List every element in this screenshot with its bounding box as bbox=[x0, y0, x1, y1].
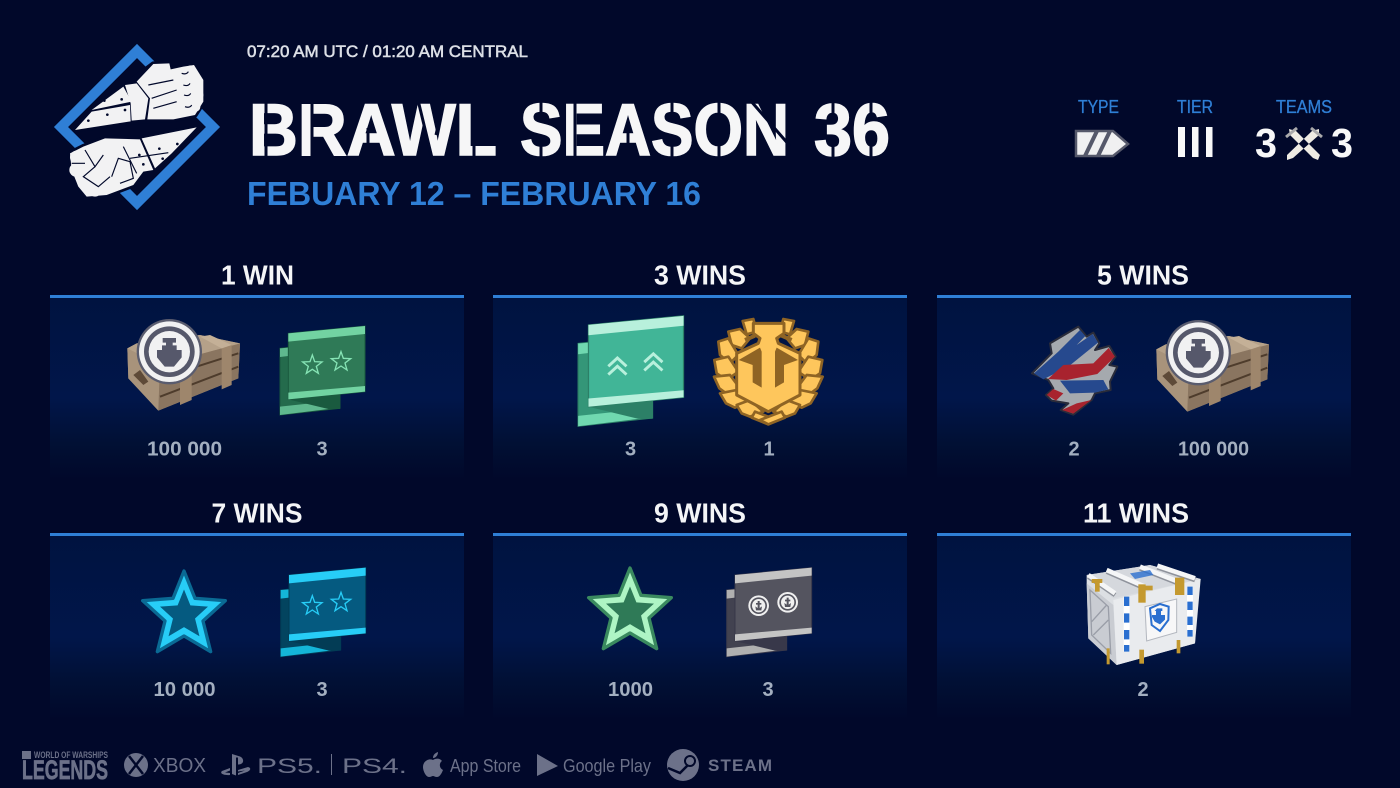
heading: 5 wins: 5 WINS bbox=[1097, 260, 1189, 290]
icon: teal chevron flag bbox=[578, 316, 684, 426]
icon: credits crate bbox=[1156, 320, 1269, 412]
logo: App Store: App Store bbox=[450, 756, 521, 776]
label: 2: 2 bbox=[1137, 679, 1149, 701]
icon: green star bbox=[589, 568, 671, 649]
panel: 1 win bbox=[50, 260, 464, 480]
logo: Steam bbox=[667, 749, 772, 781]
panel: 5 wins bbox=[937, 260, 1351, 480]
label: 100 000: 100 000 bbox=[147, 438, 222, 460]
panel: 3 wins bbox=[493, 260, 907, 480]
icon: green star flag bbox=[280, 326, 365, 415]
heading: 1 win: 1 WIN bbox=[221, 260, 294, 290]
info: tier bbox=[1177, 97, 1213, 157]
info: teams bbox=[1255, 97, 1353, 166]
logo: Google Play: Google Play bbox=[563, 756, 651, 776]
logo: Xbox bbox=[124, 753, 206, 777]
logo: App Store bbox=[423, 752, 521, 777]
footer: platform logos bbox=[22, 749, 772, 785]
info: type: TYPE bbox=[1078, 97, 1119, 117]
label: 3: 3 bbox=[316, 679, 328, 701]
logo: Steam: STEAM bbox=[708, 756, 772, 775]
icon: crossed swords bbox=[1286, 128, 1322, 160]
panel: 11 wins bbox=[937, 498, 1351, 720]
icon: blue star bbox=[143, 571, 225, 652]
info: tier: TIER bbox=[1177, 97, 1213, 117]
label: 3: 3 bbox=[625, 438, 636, 460]
heading: 11 wins: 11 WINS bbox=[1083, 498, 1189, 528]
heading: 3 wins: 3 WINS bbox=[654, 260, 746, 290]
icon: white premium crate bbox=[1087, 565, 1201, 665]
panel: 9 wins bbox=[493, 498, 907, 720]
logo: crossed gauntlets in a diamond bbox=[61, 51, 213, 203]
date range: FEBUARY 12 – FEBRUARY 16 bbox=[247, 175, 701, 212]
title: SEASON bbox=[520, 90, 789, 171]
info: teams: 3 bbox=[1331, 120, 1353, 166]
info: type bbox=[1076, 97, 1128, 156]
title: 36 bbox=[814, 90, 890, 171]
title: BRAWL bbox=[249, 90, 497, 171]
icon: grey coin flag bbox=[727, 568, 812, 657]
title bbox=[249, 90, 890, 171]
label: 100 000: 100 000 bbox=[1178, 438, 1249, 460]
time line: 07:20 AM UTC / 01:20 AM CENTRAL bbox=[247, 42, 528, 61]
icon: blue star flag bbox=[281, 568, 366, 657]
icon: gold laurel emblem bbox=[714, 319, 823, 424]
label: 1: 1 bbox=[763, 438, 775, 460]
label: 3: 3 bbox=[762, 679, 774, 701]
icon: credits crate bbox=[127, 319, 240, 411]
logo: World of Warships Legends: LEGENDS bbox=[22, 755, 108, 785]
label: 2: 2 bbox=[1068, 438, 1080, 460]
logo: World of Warships Legends bbox=[22, 750, 108, 785]
logo: Xbox: XBOX bbox=[153, 755, 206, 777]
info: teams: 3 bbox=[1255, 120, 1277, 166]
heading: 7 wins: 7 WINS bbox=[212, 498, 302, 528]
label: 1000: 1000 bbox=[608, 679, 653, 701]
logo: PlayStation 5 and 4: PS5. bbox=[257, 755, 322, 778]
info: teams: TEAMS bbox=[1276, 97, 1332, 117]
logo: PlayStation 5 and 4 bbox=[221, 754, 407, 778]
label: 10 000: 10 000 bbox=[154, 679, 216, 701]
logo: PlayStation 5 and 4: PS4. bbox=[342, 755, 407, 778]
logo: World of Warships Legends: WORLD OF WARSHIPS bbox=[34, 750, 108, 760]
logo: Google Play bbox=[537, 754, 651, 776]
heading: 9 wins: 9 WINS bbox=[654, 498, 746, 528]
icon: tricolour camouflage bbox=[1032, 327, 1117, 415]
panel: 7 wins bbox=[50, 498, 464, 720]
label: 3: 3 bbox=[316, 438, 328, 460]
